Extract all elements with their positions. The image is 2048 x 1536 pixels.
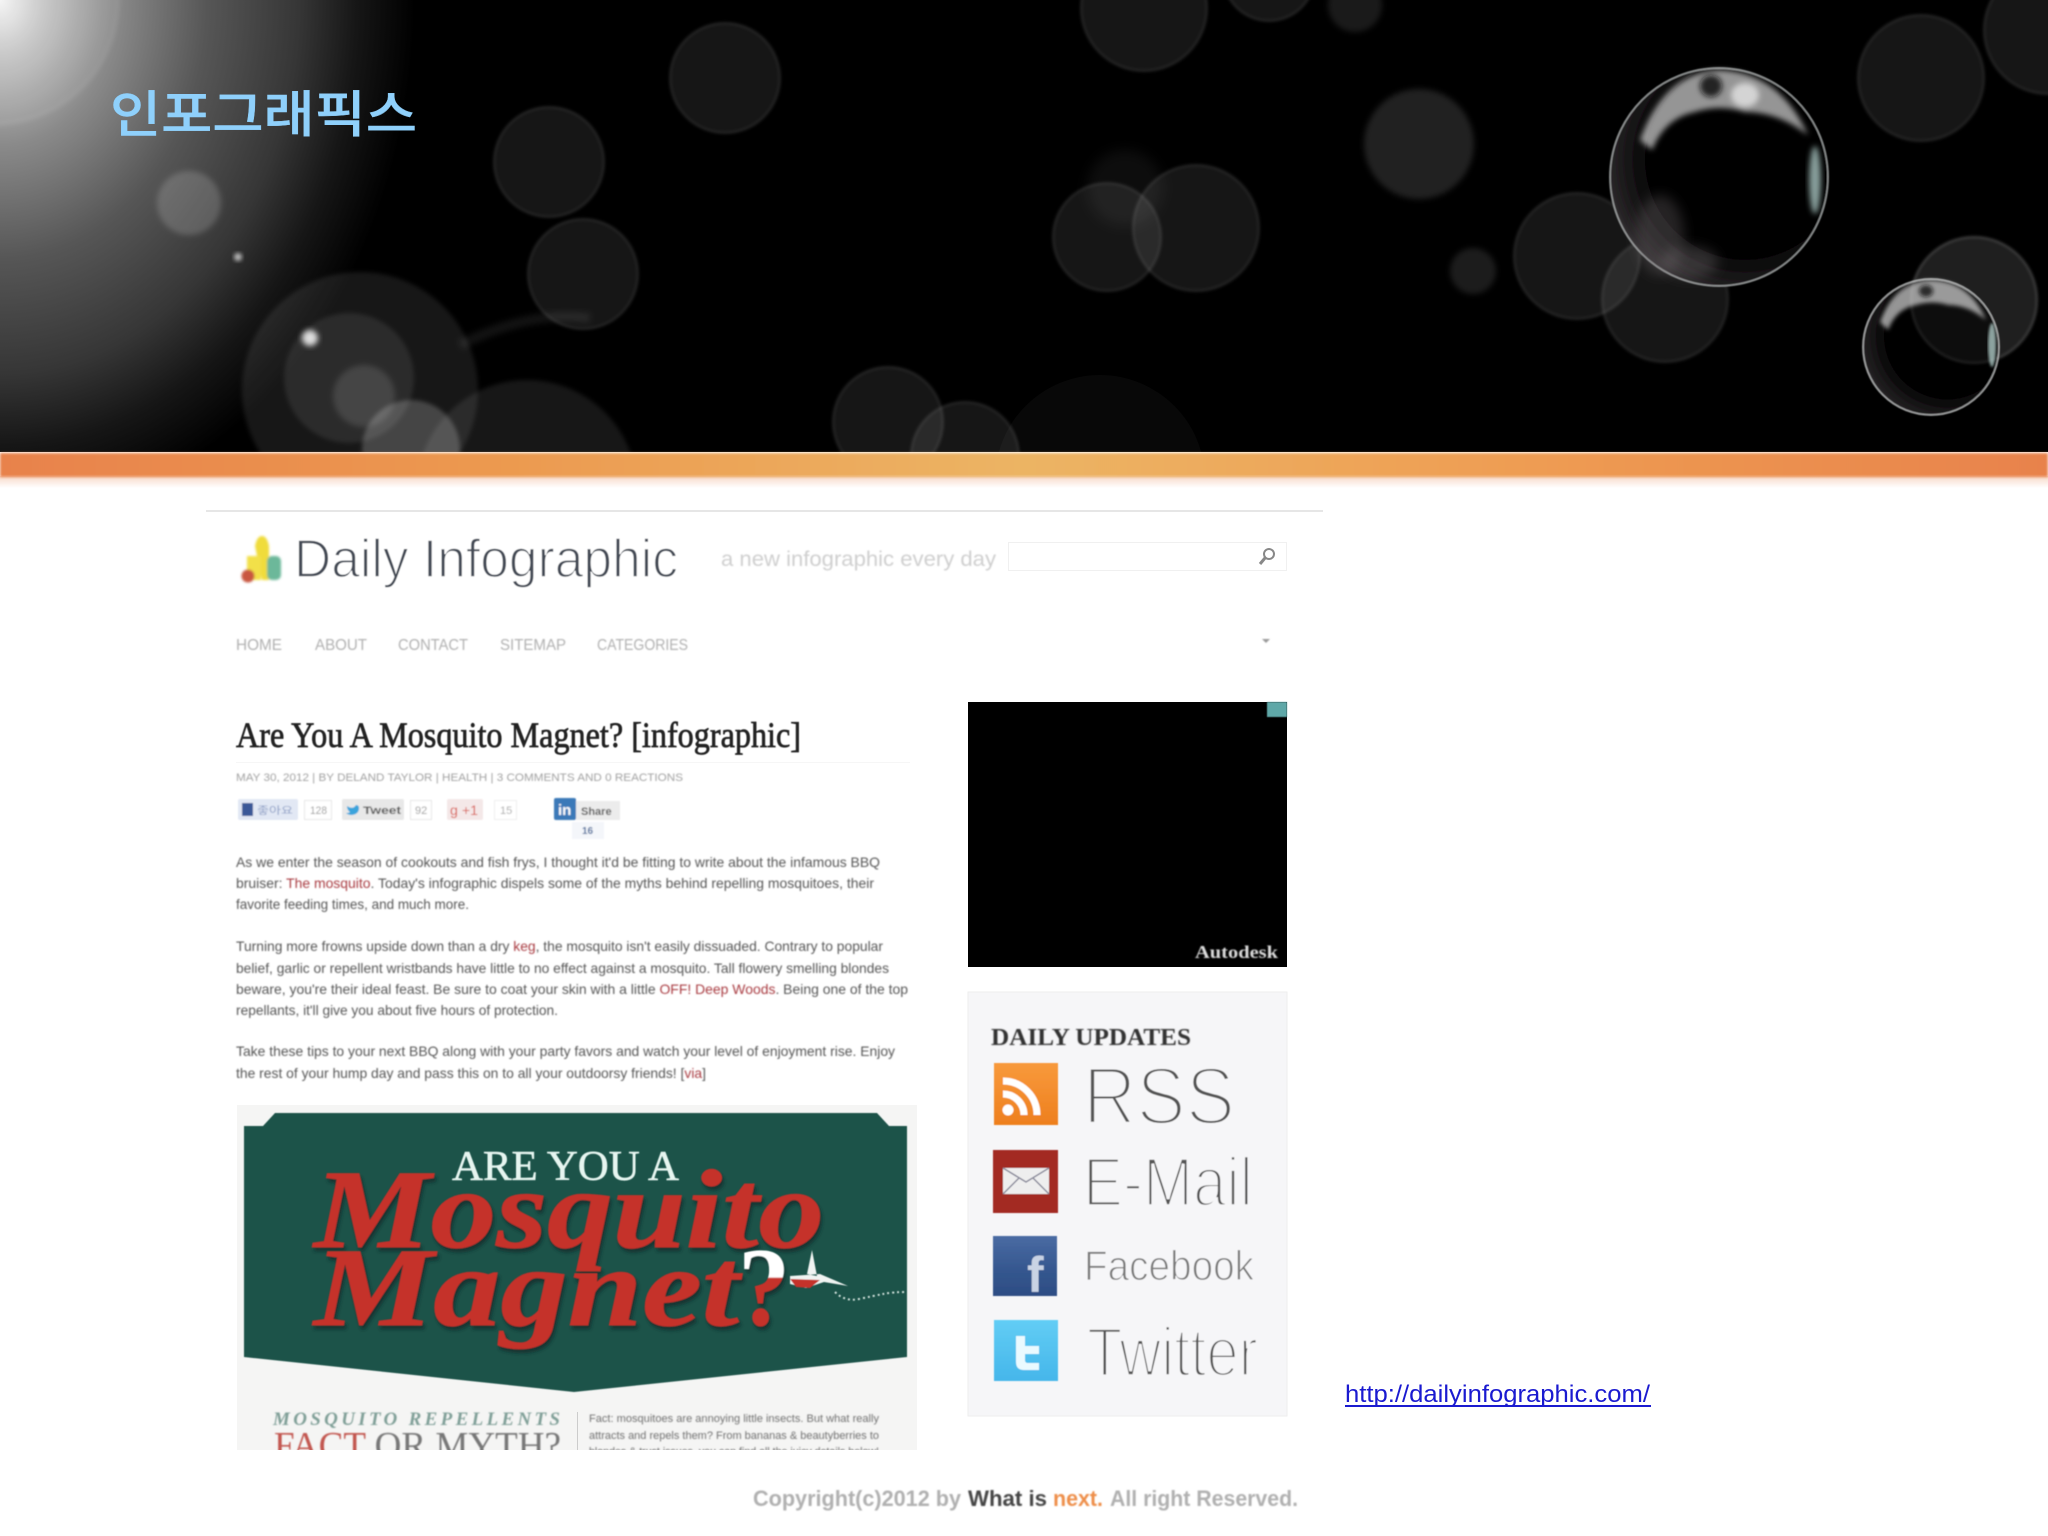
panel: mosquito magnet infographic preview (237, 1105, 917, 1467)
RSS label: RSS (1083, 1051, 1235, 1142)
banner subtitle: ARE YOU A (452, 1144, 680, 1190)
article body text: As we enter the season of cookouts and fish frys, I thought it'd be fitting to write about the infamous BBQ (236, 854, 880, 870)
social share buttons: 좋아요 (257, 805, 293, 817)
social share buttons: in (558, 802, 571, 819)
navigation menu: HOME (236, 637, 282, 654)
navigation menu: SITEMAP (500, 637, 566, 654)
article body text: beware, you're their ideal feast. Be sure to coat your skin with a little OFF! Deep Woods. Being one of the top (236, 981, 908, 997)
panel: website screenshot header (206, 510, 1323, 654)
Facebook label: Facebook (1084, 1242, 1255, 1289)
panel heading: DAILY UPDATES (991, 1025, 1191, 1051)
intro paragraph: Fact: mosquitoes are annoying little insects. But what really (589, 1413, 879, 1425)
navigation menu: CONTACT (398, 637, 468, 654)
banner headline: Magnet (311, 1250, 787, 1354)
article body text: belief, garlic or repellent wristbands have little to no effect against a mosquito. Tall flowery smelling blondes (236, 960, 889, 976)
intro paragraph: blondes & trust issues, you can find all the juicy details below! (589, 1446, 879, 1458)
banner headline: Magnet: ? (738, 1226, 790, 1350)
article body text: favorite feeding times, and much more. (236, 896, 469, 912)
search box (1008, 542, 1286, 570)
copyright footer: next. (1053, 1486, 1103, 1511)
social share buttons: g +1 (450, 802, 478, 818)
article body text: bruiser: The mosquito. Today's infographic dispels some of the myths behind repelling mosquitoes, their (236, 875, 874, 891)
social share buttons: 15 (500, 805, 512, 817)
icon: Daily Infographic logo (242, 536, 281, 582)
banner: dark background with bokeh circles (0, 0, 2048, 452)
icon: Facebook (993, 1236, 1057, 1303)
icon: e-mail (993, 1150, 1058, 1213)
source link: http://dailyinfographic.com/ (1345, 1381, 1650, 1408)
subheading: mosquito repellents: MOSQUITO REPELLENTS (272, 1409, 560, 1430)
subheading: fact or myth: FACT OR MYTH? (274, 1425, 561, 1467)
icon: Facebook: f (1027, 1247, 1044, 1303)
copyright footer: All right Reserved. (1110, 1486, 1298, 1511)
navigation menu: CATEGORIES (597, 637, 688, 654)
banner headline: Mosquito: Mosquito (312, 1148, 824, 1272)
social share buttons: 128 (310, 805, 327, 817)
social share buttons: 92 (415, 805, 427, 817)
icon: RSS (994, 1063, 1058, 1125)
site name: Daily Infographic (294, 529, 678, 589)
title: 인포그래픽스 (110, 87, 417, 143)
tagline: a new infographic every day (721, 548, 997, 571)
article body text: Take these tips to your next BBQ along with your party favors and watch your level of enjoyment rise. Enjoy (236, 1043, 895, 1059)
article body text: repellants, it'll give you about five hours of protection. (236, 1002, 558, 1018)
copyright footer: Copyright(c)2012 by (753, 1486, 962, 1511)
copyright footer (753, 1486, 1298, 1511)
social share buttons: 16 (582, 826, 594, 837)
icon: small soap bubble (1863, 237, 2037, 415)
navigation menu: ABOUT (315, 637, 367, 654)
icon: Twitter (994, 1320, 1058, 1381)
social share buttons: Share (581, 806, 612, 818)
navigation menu (236, 637, 1270, 654)
panel: daily updates (968, 992, 1287, 1416)
article body text: Turning more frowns upside down than a dry keg, the mosquito isn't easily dissuaded. Contrary to popular (236, 938, 883, 954)
E-Mail label: E-Mail (1083, 1143, 1253, 1221)
article body text (236, 854, 908, 1081)
icon: large soap bubble (1610, 68, 1828, 286)
Twitter label: Twitter (1087, 1313, 1258, 1391)
copyright footer: What is (968, 1486, 1047, 1511)
social share buttons (238, 798, 620, 839)
icon: mosquito with dotted trail (790, 1250, 907, 1300)
social share buttons: Tweet (363, 805, 401, 817)
article body text: the rest of your hump day and pass this on to all your outdoorsy friends! [via] (236, 1065, 706, 1081)
article heading: Are You A Mosquito Magnet? [infographic] (236, 715, 801, 755)
panel: Autodesk advertisement (968, 702, 1287, 967)
orange divider band (0, 453, 2048, 488)
panel: Autodesk advertisement: Autodesk (1195, 942, 1278, 962)
banner headline: Magnet: Magnet (312, 1226, 742, 1350)
intro paragraph (588, 1413, 880, 1450)
intro paragraph: attracts and repels them? From bananas & beautyberries to (589, 1430, 879, 1442)
green header banner (244, 1113, 907, 1392)
panel: article (236, 715, 910, 1081)
article meta line: MAY 30, 2012 | BY DELAND TAYLOR | HEALTH | 3 COMMENTS AND 0 REACTIONS (236, 772, 683, 784)
